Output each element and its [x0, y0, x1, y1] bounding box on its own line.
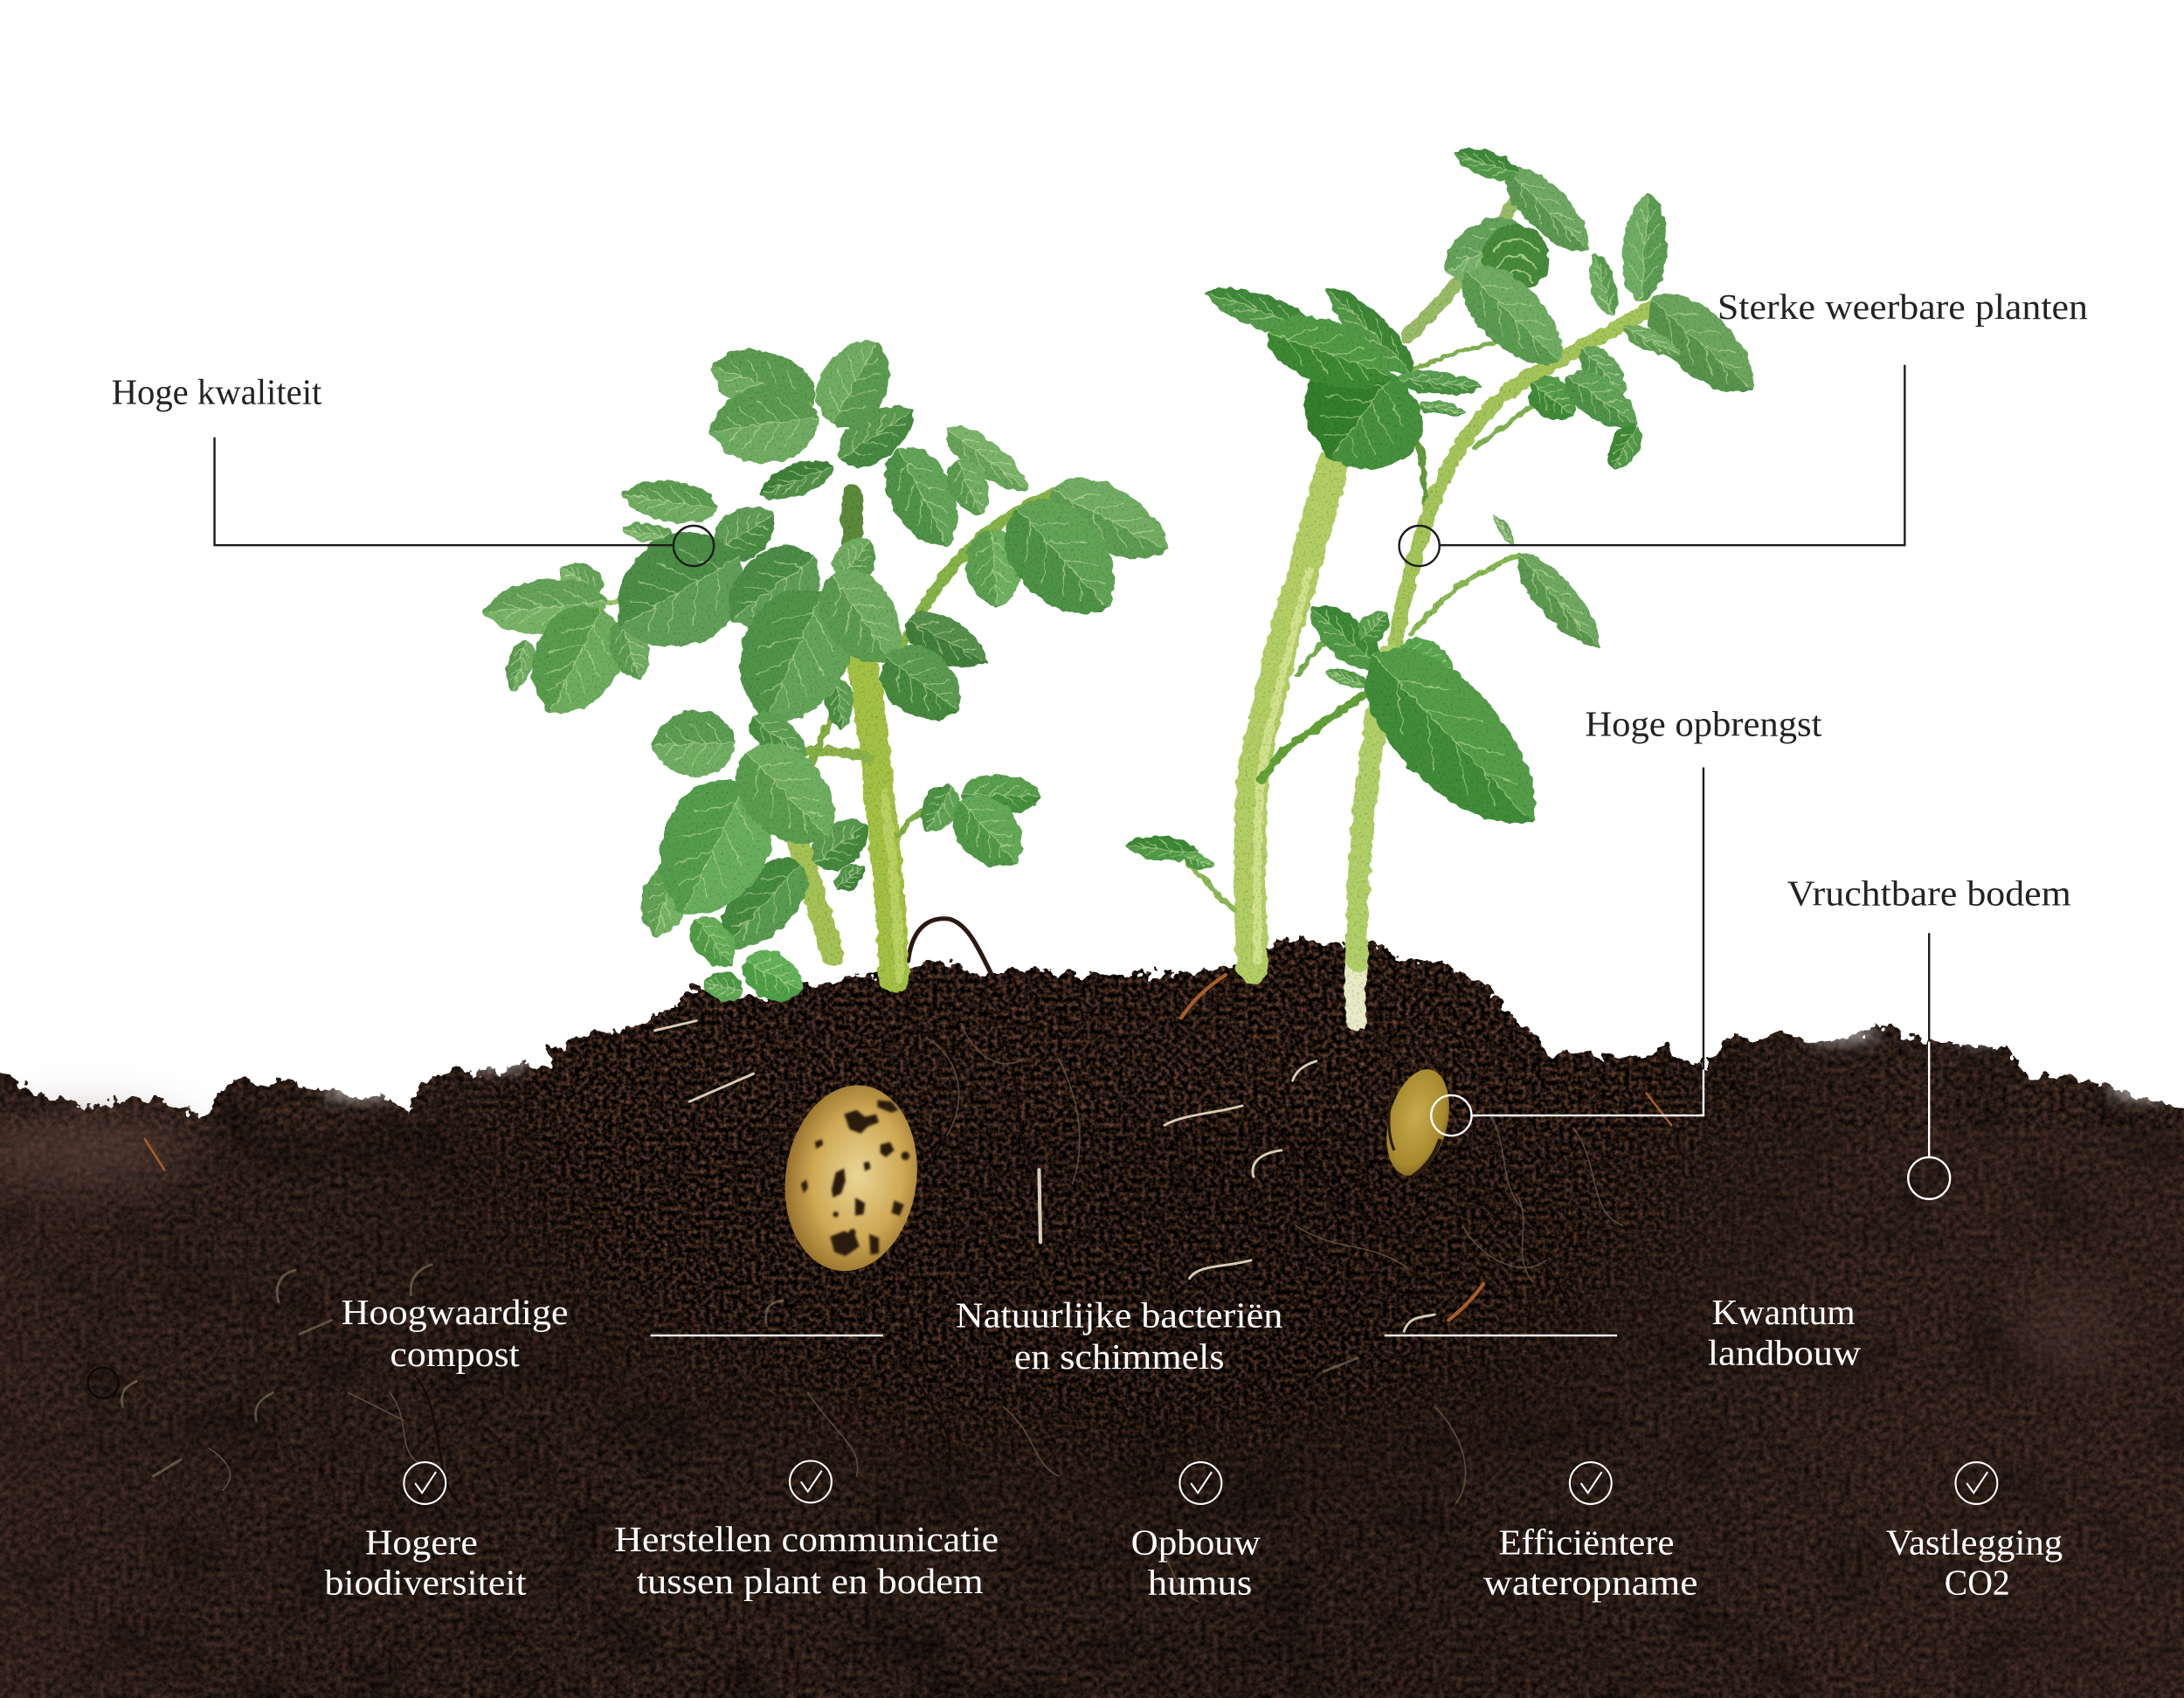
stray marker circle	[87, 1368, 119, 1398]
potato left	[773, 1077, 929, 1280]
benefit: Efficiëntere wateropname	[1483, 1462, 1698, 1603]
soil edge fuzz	[323, 1026, 2181, 1097]
benefit text	[325, 1522, 527, 1603]
leader line and marker	[1400, 365, 1904, 566]
potato right	[1377, 1063, 1460, 1182]
heading: Hoogwaardige compost	[342, 1292, 569, 1374]
leader line and marker	[1908, 933, 1950, 1199]
benefit text: Herstellen communicatie	[614, 1519, 999, 1559]
leader line and marker	[215, 438, 714, 566]
soil haze left	[0, 1117, 197, 1184]
connector line	[651, 1335, 883, 1336]
icon: check	[1570, 1462, 1612, 1504]
callout: Vruchtbare bodem	[1787, 873, 2071, 1199]
benefit: Herstellen communicatie	[614, 1460, 999, 1601]
heading: Natuurlijke bacteriën en schimmels	[956, 1294, 1283, 1377]
label: Vruchtbare bodem: Vruchtbare bodem	[1787, 873, 2071, 913]
benefit text	[1131, 1522, 1261, 1603]
callout: Sterke weerbare planten	[1400, 286, 2088, 566]
benefit text: wateropname	[1483, 1563, 1698, 1603]
plant left	[480, 325, 1182, 1012]
benefit text: biodiversiteit	[325, 1563, 527, 1603]
label: Hoge opbrengst: Hoge opbrengst	[1585, 704, 1822, 744]
heading: Kwantum landbouw	[1708, 1292, 1861, 1372]
plant right	[1124, 141, 1773, 1019]
soil shading	[0, 1128, 2184, 1698]
benefit text: Vastlegging	[1886, 1522, 2063, 1562]
benefit text: tussen plant en bodem	[637, 1561, 984, 1601]
benefit text: Opbouw	[1131, 1522, 1261, 1562]
heading: Kwantum landbouw: Kwantum	[1711, 1292, 1856, 1332]
callout: Hoge opbrengst	[1431, 704, 1822, 1135]
stems right plant	[1188, 195, 1654, 1019]
leader line and marker	[1431, 767, 1704, 1135]
benefit: Hogere biodiversiteit	[325, 1462, 527, 1603]
benefit text	[1483, 1522, 1698, 1603]
benefit text	[1886, 1522, 2063, 1603]
icon: check	[790, 1460, 832, 1502]
label: Hoge kwaliteit: Hoge kwaliteit	[112, 371, 322, 411]
heading: Hoogwaardige compost: Hoogwaardige	[342, 1292, 569, 1332]
heading: Hoogwaardige compost: compost	[390, 1334, 520, 1374]
icon: check	[404, 1462, 446, 1504]
leaves right plant	[1124, 141, 1773, 873]
soil haze right	[2017, 1282, 2117, 1377]
benefit text: CO2	[1945, 1563, 2010, 1603]
connector line	[1385, 1335, 1617, 1336]
icon: check	[1956, 1462, 1997, 1504]
icon: check	[1179, 1462, 1221, 1504]
roots in the soil	[122, 919, 1671, 1602]
stems left plant	[602, 493, 1054, 977]
potato soil spots	[801, 1101, 909, 1256]
benefit text: Efficiëntere	[1499, 1522, 1674, 1562]
benefit: Opbouw humus	[1131, 1462, 1261, 1603]
heading: Kwantum landbouw: landbouw	[1708, 1332, 1861, 1372]
benefit text: humus	[1148, 1563, 1252, 1603]
soil clods centre	[355, 935, 1851, 1513]
callout: Hoge kwaliteit	[112, 371, 714, 566]
leaves left plant	[480, 325, 1182, 1012]
label: Sterke weerbare planten: Sterke weerbare planten	[1717, 286, 2088, 327]
root loop above soil	[909, 919, 992, 975]
panel: soil cross-section	[0, 935, 2184, 1698]
benefit text	[614, 1519, 999, 1601]
benefit text: Hogere	[365, 1522, 478, 1562]
bud	[1482, 224, 1549, 291]
heading: Natuurlijke bacteriën en schimmels: Natuurlijke bacteriën	[956, 1294, 1283, 1335]
benefit: Vastlegging CO2	[1886, 1462, 2063, 1603]
heading: Natuurlijke bacteriën en schimmels: en schimmels	[1014, 1336, 1224, 1377]
